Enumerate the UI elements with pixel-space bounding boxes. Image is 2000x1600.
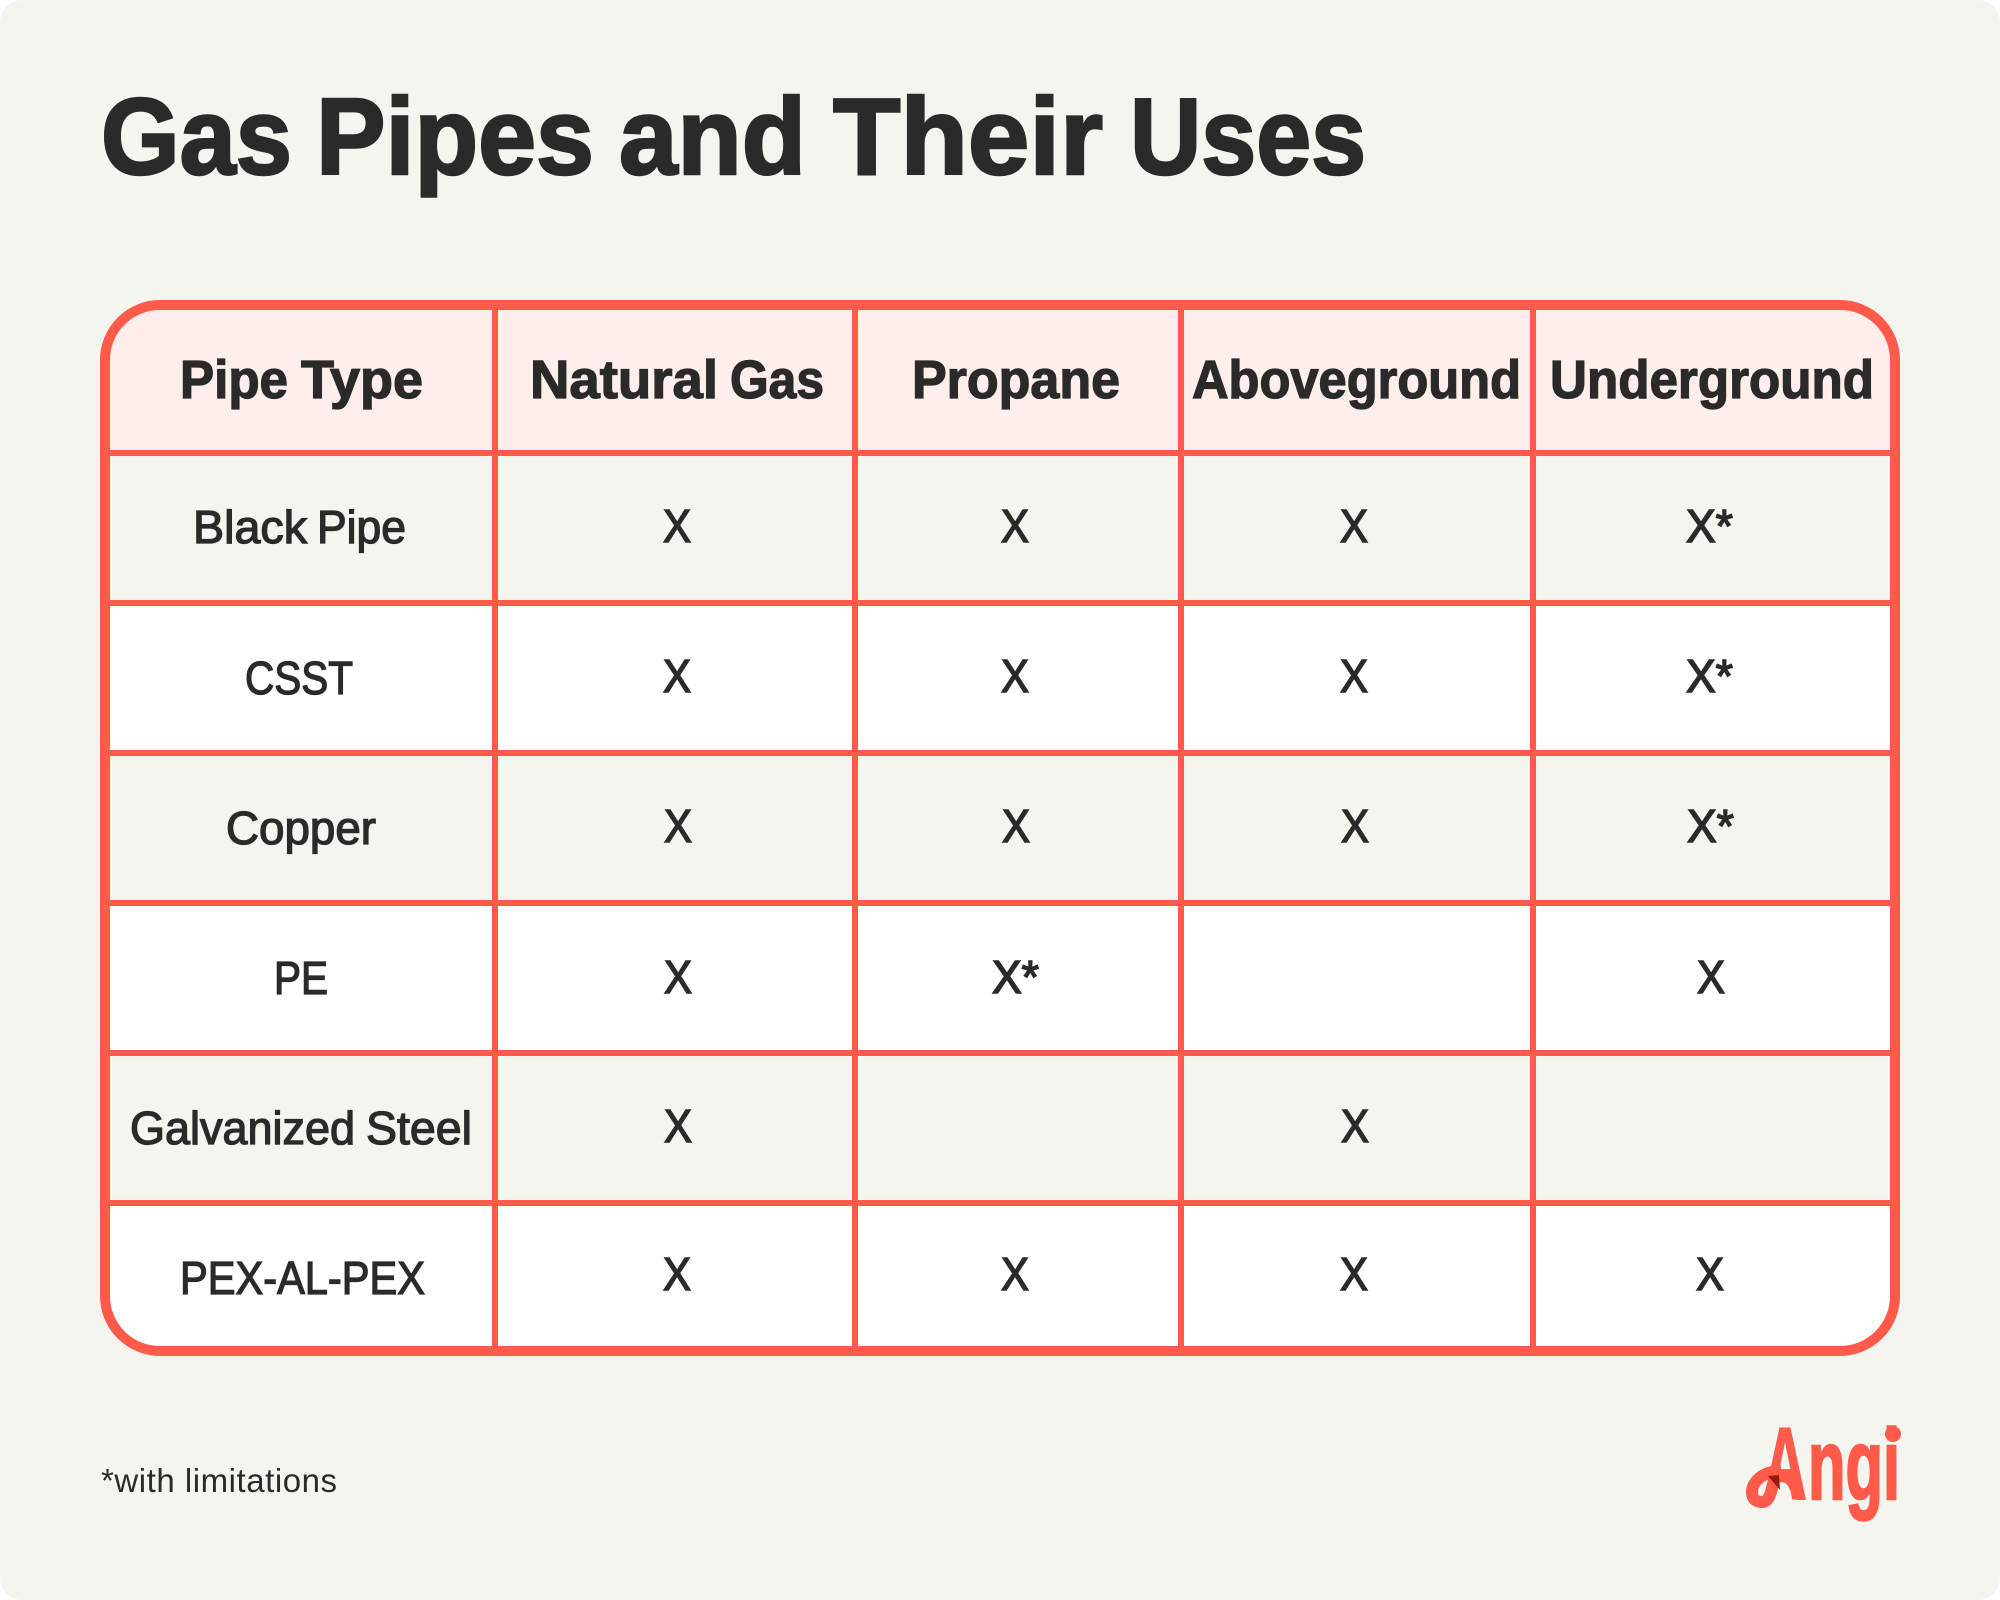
row: Galvanized Steel — [130, 1100, 1369, 1154]
logo loop shadow — [1768, 1475, 1780, 1490]
row: PEX-AL-PEX: X — [663, 1248, 691, 1300]
row: Black Pipe: Pipe — [317, 501, 406, 553]
table: pipe types and uses — [100, 300, 1900, 1356]
row: PE: X — [664, 951, 692, 1003]
title: Uses — [1130, 76, 1366, 198]
header row: Gas — [730, 350, 824, 410]
row: CSST: X — [1340, 650, 1368, 702]
logo loop — [1752, 1471, 1798, 1502]
row: PEX-AL-PEX: X — [1696, 1248, 1724, 1300]
row: PE: X — [1697, 951, 1725, 1003]
logo i dot — [1885, 1426, 1901, 1442]
row: Copper: X — [1002, 800, 1030, 852]
row: PE — [274, 951, 1725, 1004]
header row: Underground — [1550, 350, 1874, 410]
table grid lines — [105, 305, 1895, 1351]
row: Black Pipe — [193, 500, 1733, 553]
row: PEX-AL-PEX: X — [1340, 1248, 1368, 1300]
title — [101, 76, 1366, 198]
row: Copper: X — [664, 800, 692, 852]
row: Copper — [226, 800, 1734, 854]
row: Black Pipe: X* — [1686, 500, 1733, 552]
header row: Aboveground — [1192, 350, 1521, 410]
row: PE: X* — [992, 951, 1039, 1003]
row: Galvanized Steel: X — [664, 1100, 692, 1152]
row: Copper: Copper — [226, 802, 376, 854]
row: Black Pipe: X — [1001, 500, 1029, 552]
logo: Angi: ngi — [1808, 1409, 1900, 1521]
title: and — [619, 76, 806, 198]
row: CSST — [245, 650, 1733, 704]
table outer border — [105, 305, 1895, 1351]
logo: Angi — [1752, 1406, 1901, 1521]
header row: Natural — [530, 350, 718, 410]
row: Galvanized Steel: Galvanized — [130, 1102, 355, 1154]
table cell backgrounds — [100, 300, 1900, 1356]
footnote: *with limitations — [101, 1462, 337, 1499]
title: Gas — [101, 76, 292, 198]
row: PEX-AL-PEX: X — [1001, 1248, 1029, 1300]
header row: Pipe — [180, 350, 288, 410]
header row: Propane — [912, 350, 1120, 410]
row: CSST: X — [1001, 650, 1029, 702]
row: Black Pipe: X — [663, 500, 691, 552]
row: Galvanized Steel: X — [1341, 1100, 1369, 1152]
header row: Type — [301, 350, 423, 410]
title: Pipes — [316, 76, 594, 198]
logo: Angi: A — [1763, 1406, 1807, 1521]
row: Black Pipe: Black — [193, 501, 308, 553]
row: PE: PE — [274, 952, 328, 1004]
row: Copper: X — [1341, 800, 1369, 852]
header row — [180, 350, 1874, 410]
title: Their — [833, 76, 1103, 198]
row: CSST: X — [663, 650, 691, 702]
row: PEX-AL-PEX: PEX-AL-PEX — [180, 1252, 425, 1304]
row: Copper: X* — [1687, 800, 1734, 852]
row: PEX-AL-PEX — [180, 1248, 1724, 1304]
row: Galvanized Steel: Steel — [366, 1102, 472, 1154]
row: CSST: CSST — [245, 652, 353, 704]
row: Black Pipe: X — [1340, 500, 1368, 552]
row: CSST: X* — [1686, 650, 1733, 702]
